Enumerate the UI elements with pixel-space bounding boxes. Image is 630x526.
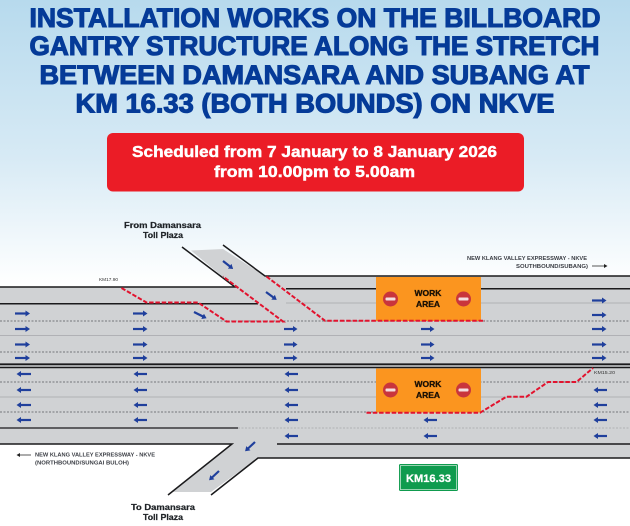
schedule banner: Scheduled from 7 January to 8 January 2026 (132, 144, 497, 161)
label: northbound direction (16, 452, 155, 466)
work area: southbound: WORK (415, 288, 442, 298)
schedule banner: from 10.00pm to 5.00am (214, 164, 415, 181)
work area: southbound (376, 277, 481, 321)
ramp arrows (194, 261, 274, 478)
westbound arrows (20, 374, 607, 436)
title: BETWEEN DAMANSARA AND SUBANG AT (40, 60, 590, 90)
schedule banner (107, 133, 524, 192)
label: southbound direction: SOUTHBOUND/SUBANG) (516, 264, 588, 270)
label: southbound direction: NEW KLANG VALLEY EXPRESSWAY - NKVE (467, 256, 587, 262)
label: northbound direction: NEW KLANG VALLEY EXPRESSWAY - NKVE (35, 452, 155, 458)
eastbound arrows (15, 300, 602, 358)
title (30, 3, 600, 118)
road surface (0, 249, 630, 492)
label: to Damansara Toll Plaza (131, 502, 195, 522)
title: GANTRY STRUCTURE ALONG THE STRETCH (30, 31, 600, 61)
label: to Damansara Toll Plaza: To Damansara (131, 502, 195, 512)
label: KM15.20: KM15.20 (594, 370, 615, 376)
lane markings (0, 303, 630, 428)
label: from Damansara Toll Plaza (124, 220, 201, 240)
title: KM 16.33 (BOTH BOUNDS) ON NKVE (76, 88, 554, 118)
KM16.33 sign: KM16.33 (406, 473, 451, 485)
work area: northbound (376, 368, 481, 412)
icon: no entry (383, 292, 398, 306)
work area: northbound: WORK (415, 379, 442, 389)
label: southbound direction (467, 256, 608, 270)
label: northbound direction: (NORTHBOUND/SUNGAI BULOH) (35, 460, 129, 466)
KM16.33 sign (399, 464, 458, 491)
work area: northbound: AREA (416, 390, 440, 400)
label: from Damansara Toll Plaza: From Damansara (124, 220, 201, 230)
road edges and median (0, 245, 630, 495)
icon: no entry (456, 382, 471, 398)
title: INSTALLATION WORKS ON THE BILLBOARD (30, 3, 600, 33)
icon: no entry (456, 292, 471, 306)
work area: southbound: AREA (416, 299, 440, 309)
red dashed closure lines (122, 276, 593, 413)
label: KM17.90: KM17.90 (99, 277, 118, 283)
label: to Damansara Toll Plaza: Toll Plaza (143, 512, 183, 522)
road diagram (0, 245, 630, 495)
icon: no entry (383, 382, 398, 398)
label: from Damansara Toll Plaza: Toll Plaza (143, 230, 183, 240)
